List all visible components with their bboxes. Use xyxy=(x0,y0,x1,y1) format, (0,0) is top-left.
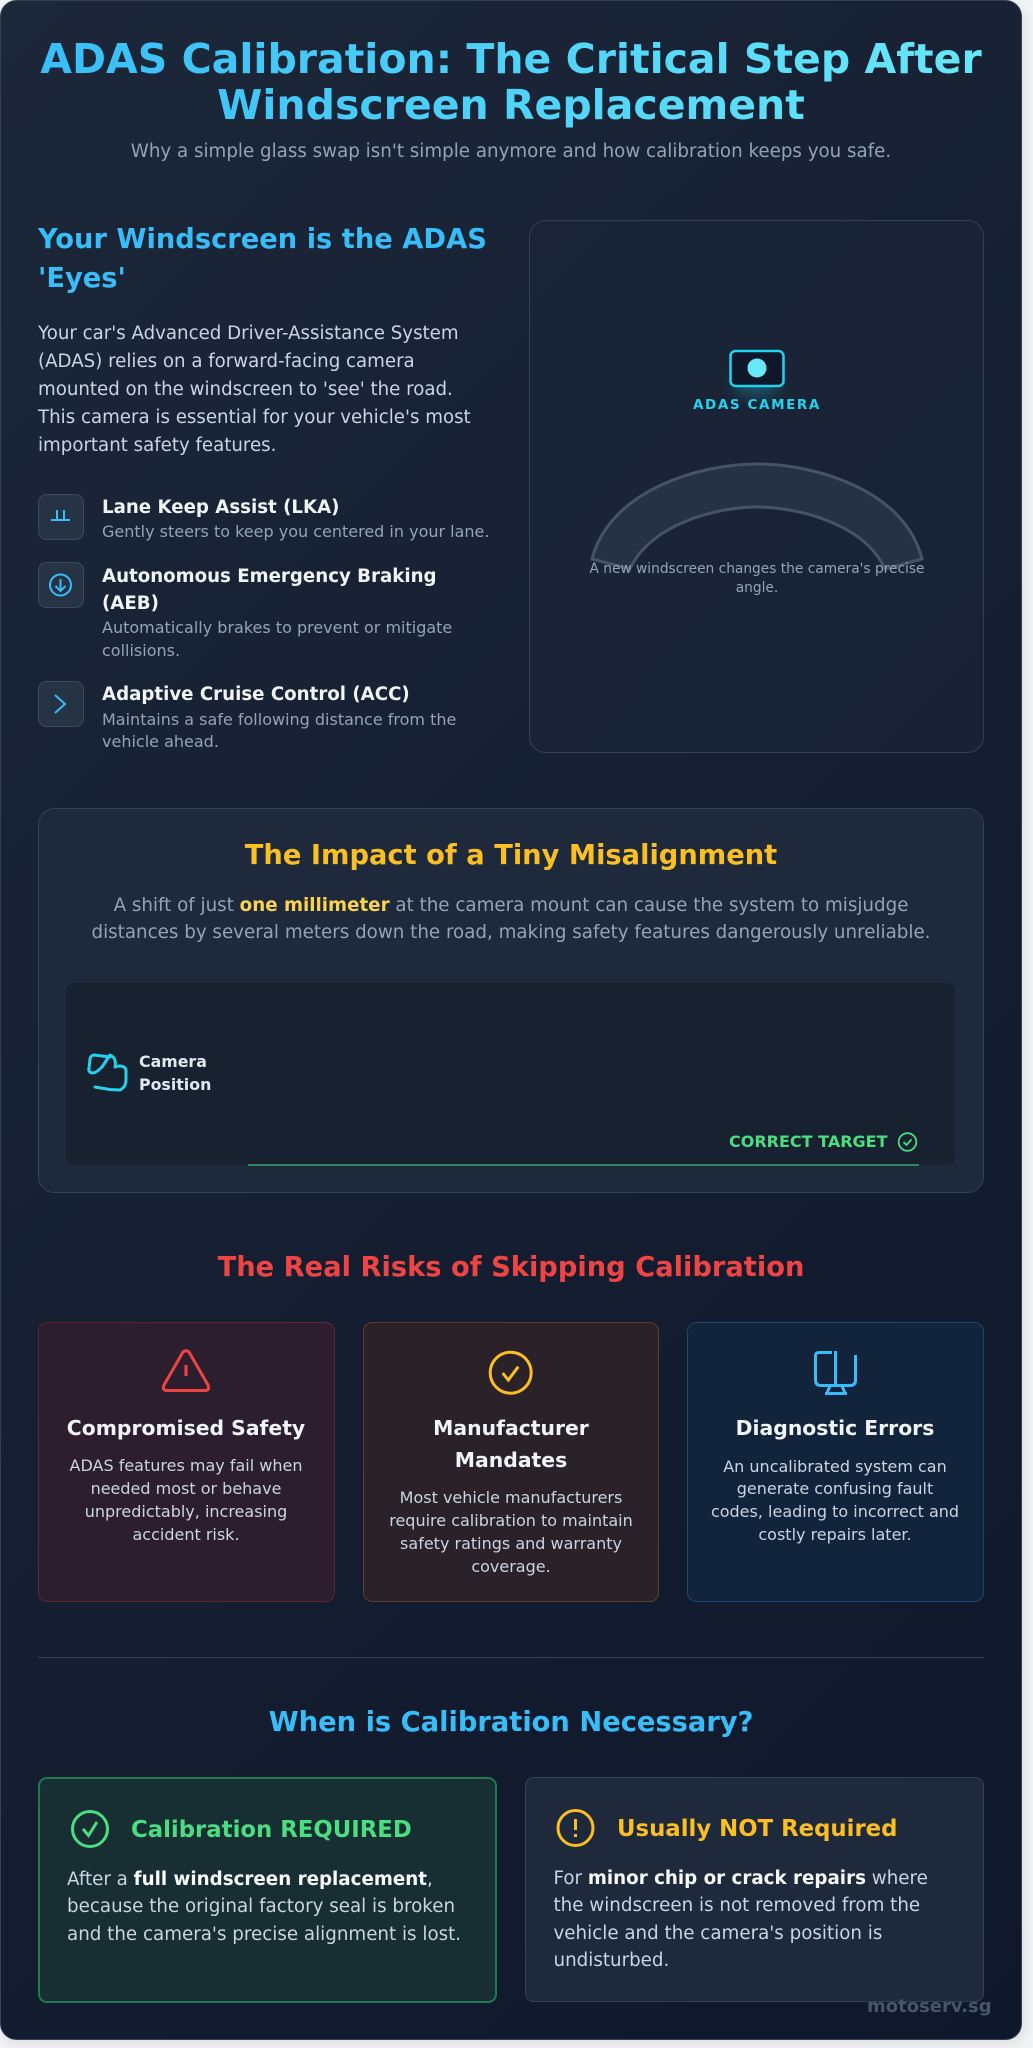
feature: lane keep assist: Lane Keep Assist (LKA) xyxy=(102,497,339,518)
risk card: diagnostic errors: Diagnostic Errors xyxy=(736,1416,934,1440)
icon: target check xyxy=(899,1133,916,1151)
panel: camera diagram xyxy=(530,220,984,752)
risk card: diagnostic errors: generate confusing fault xyxy=(737,1479,933,1498)
card: calibration required xyxy=(39,1778,496,2002)
risk card: manufacturer mandates: Most vehicle manufacturers xyxy=(400,1488,622,1507)
watermark: motoserv.sg xyxy=(867,1996,992,2017)
card: usually not required: undisturbed. xyxy=(554,1950,669,1971)
heading xyxy=(37,224,487,294)
card: calibration required: Calibration REQUIRED xyxy=(131,1817,412,1843)
label: camera position: Position xyxy=(139,1075,211,1094)
risk card: diagnostic errors: codes, leading to incorrect and xyxy=(711,1502,959,1521)
feature: adaptive cruise control xyxy=(38,682,456,751)
intro paragraph: important safety features. xyxy=(38,435,276,456)
title xyxy=(40,35,982,129)
risk card: compromised safety xyxy=(38,1322,334,1602)
feature: lane keep assist: Gently steers to keep you centered in your lane. xyxy=(102,522,489,541)
camera label: ADAS CAMERA xyxy=(693,397,821,413)
alignment diagram xyxy=(66,983,955,1165)
target line xyxy=(248,1164,919,1166)
paragraph: distances by several meters down the road, making safety features dangerously unreliable. xyxy=(92,922,930,943)
risk card: diagnostic errors: An uncalibrated system can xyxy=(723,1457,947,1476)
card: calibration required: because the original factory seal is broken xyxy=(67,1896,455,1917)
title: ADAS Calibration: The Critical Step After xyxy=(40,35,982,83)
icon: monitor xyxy=(816,1351,856,1394)
risk card: compromised safety: needed most or behave xyxy=(91,1479,281,1498)
risk card: compromised safety: unpredictably, increasing xyxy=(85,1502,287,1521)
intro paragraph xyxy=(37,323,471,456)
card: calibration required: and the camera's precise alignment is lost. xyxy=(67,1924,461,1945)
card: usually not required: For minor chip or crack repairs where xyxy=(554,1868,928,1889)
caption xyxy=(589,561,925,596)
icon: chevron xyxy=(55,695,65,713)
paragraph xyxy=(92,895,930,943)
icon: camera position xyxy=(89,1055,126,1090)
risk card: manufacturer mandates: require calibration to maintain xyxy=(389,1511,633,1530)
icon: lane lines xyxy=(51,510,70,520)
icon: check circle xyxy=(490,1352,531,1393)
title: Windscreen Replacement xyxy=(217,81,805,129)
feature: autonomous emergency braking: Automatically brakes to prevent or mitigate xyxy=(102,618,452,637)
risk card: manufacturer mandates: coverage. xyxy=(471,1557,551,1576)
icon: exclamation circle xyxy=(558,1810,593,1846)
card: usually not required: vehicle and the camera's position is xyxy=(554,1923,882,1944)
icon: down arrow in circle xyxy=(50,574,71,596)
caption: angle. xyxy=(736,580,778,596)
card: usually not required xyxy=(526,1778,984,2002)
feature: autonomous emergency braking: collisions. xyxy=(102,641,180,660)
section: your windscreen is the ADAS eyes xyxy=(37,224,489,751)
feature: lane keep assist xyxy=(38,494,489,541)
risk card: manufacturer mandates: Mandates xyxy=(455,1448,567,1472)
card: calibration required: After a full windscreen replacement, xyxy=(67,1869,433,1890)
intro paragraph: mounted on the windscreen to 'see' the road. xyxy=(38,379,453,400)
feature: adaptive cruise control: Adaptive Cruise Control (ACC) xyxy=(102,684,410,705)
risk card: manufacturer mandates: safety ratings and warranty xyxy=(400,1534,622,1553)
subtitle: Why a simple glass swap isn't simple anymore and how calibration keeps you safe. xyxy=(131,141,891,162)
caption: A new windscreen changes the camera's precise xyxy=(589,561,925,577)
card: usually not required: the windscreen is not removed from the xyxy=(554,1895,920,1916)
risk card: compromised safety: accident risk. xyxy=(132,1525,240,1544)
heading: The Impact of a Tiny Misalignment xyxy=(245,840,777,871)
feature: adaptive cruise control: Maintains a safe following distance from the xyxy=(102,710,456,729)
heading: Your Windscreen is the ADAS xyxy=(37,224,487,255)
risk card: manufacturer mandates: Manufacturer xyxy=(433,1416,589,1440)
feature: autonomous emergency braking: (AEB) xyxy=(102,593,159,614)
panel: tiny misalignment xyxy=(38,808,984,1192)
intro paragraph: Your car's Advanced Driver-Assistance System xyxy=(37,323,459,344)
heading: real risks: The Real Risks of Skipping Calibration xyxy=(218,1252,804,1283)
feature: autonomous emergency braking xyxy=(38,562,452,660)
intro paragraph: (ADAS) relies on a forward-facing camera xyxy=(38,351,415,372)
risk card: compromised safety: Compromised Safety xyxy=(67,1416,305,1440)
label: camera position: Camera xyxy=(139,1052,207,1071)
card: usually not required: Usually NOT Required xyxy=(617,1816,897,1842)
paragraph: A shift of just one millimeter at the camera mount can cause the system to misjudge xyxy=(114,895,908,916)
windscreen arch xyxy=(592,464,922,569)
heading: when is calibration necessary: When is Calibration Necessary? xyxy=(269,1707,753,1738)
intro paragraph: This camera is essential for your vehicle's most xyxy=(37,407,471,428)
label: camera position xyxy=(139,1052,211,1094)
feature: adaptive cruise control: vehicle ahead. xyxy=(102,732,219,751)
risk card: compromised safety: ADAS features may fail when xyxy=(70,1456,302,1475)
icon: ADAS camera xyxy=(730,351,784,396)
label: correct target: CORRECT TARGET xyxy=(729,1132,888,1151)
risk card: manufacturer mandates xyxy=(364,1322,658,1602)
risk card: diagnostic errors xyxy=(688,1322,984,1602)
icon: check circle xyxy=(72,1812,108,1846)
risk card: diagnostic errors: costly repairs later. xyxy=(758,1525,912,1544)
feature: autonomous emergency braking: Autonomous Emergency Braking xyxy=(102,566,437,587)
heading: 'Eyes' xyxy=(38,263,126,294)
icon: warning triangle xyxy=(163,1351,209,1390)
